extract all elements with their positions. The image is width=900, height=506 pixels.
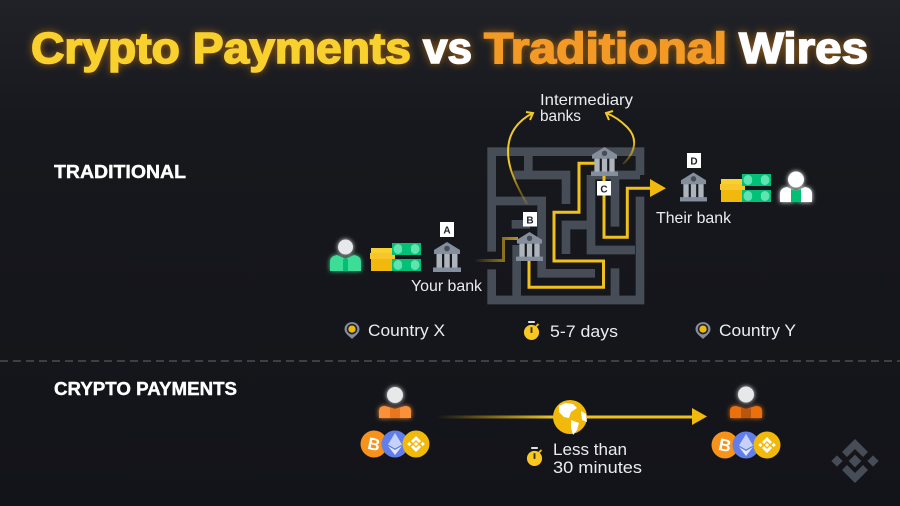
- crypto receiver person: [730, 386, 762, 418]
- intermediary banks label: Intermediary: [540, 92, 633, 109]
- crypto receiver coins: [712, 432, 780, 458]
- label D: [687, 153, 701, 168]
- sender person: [330, 240, 361, 271]
- label A: A: [443, 226, 451, 236]
- duration less than 30 minutes: 30 minutes: [553, 458, 642, 477]
- sender money: [370, 243, 421, 271]
- title: Wires: [739, 24, 868, 73]
- curved arrow left: [508, 112, 533, 204]
- heading: traditional: TRADITIONAL: [54, 162, 186, 182]
- duration less than 30 minutes: [553, 440, 642, 477]
- duration less than 30 minutes: Less than: [553, 440, 627, 459]
- intermediary banks label: [540, 92, 633, 125]
- label D: D: [690, 156, 698, 168]
- label A: [440, 222, 454, 237]
- title: vs: [423, 24, 472, 73]
- binance logo: [831, 439, 879, 483]
- title: Crypto Payments: [31, 24, 411, 73]
- label C: [597, 181, 611, 196]
- duration 5-7 days: [524, 321, 618, 341]
- label B: B: [526, 215, 534, 226]
- route: bank B to bank C: [529, 163, 604, 287]
- their bank label: Their bank: [656, 210, 732, 227]
- crypto sender coins: [360, 430, 430, 458]
- route: bank C to arrow: [604, 175, 666, 237]
- receiver money: [720, 174, 771, 202]
- bank D: [680, 173, 707, 201]
- label C: C: [600, 184, 608, 195]
- duration 5-7 days: 5-7 days: [550, 322, 618, 341]
- stopwatch crypto: [527, 447, 542, 466]
- country X: Country X: [368, 321, 445, 340]
- bank C: [591, 147, 618, 176]
- route: bank A to bank B: [474, 238, 518, 260]
- intermediary banks label: banks: [540, 108, 581, 125]
- curved arrow right: [606, 111, 634, 164]
- transfer arrow: [436, 408, 707, 425]
- heading: crypto payments: CRYPTO PAYMENTS: [54, 379, 237, 399]
- bank B: [516, 232, 543, 261]
- crypto sender person: [379, 387, 411, 418]
- globe icon: [553, 400, 587, 435]
- title: [31, 24, 868, 73]
- bank A: [433, 242, 461, 272]
- your bank label: Your bank: [411, 278, 483, 295]
- title: Traditional: [484, 24, 727, 73]
- receiver person: [780, 172, 812, 202]
- country Y: Country Y: [719, 321, 796, 340]
- maze: [492, 152, 640, 300]
- label B: [523, 212, 537, 226]
